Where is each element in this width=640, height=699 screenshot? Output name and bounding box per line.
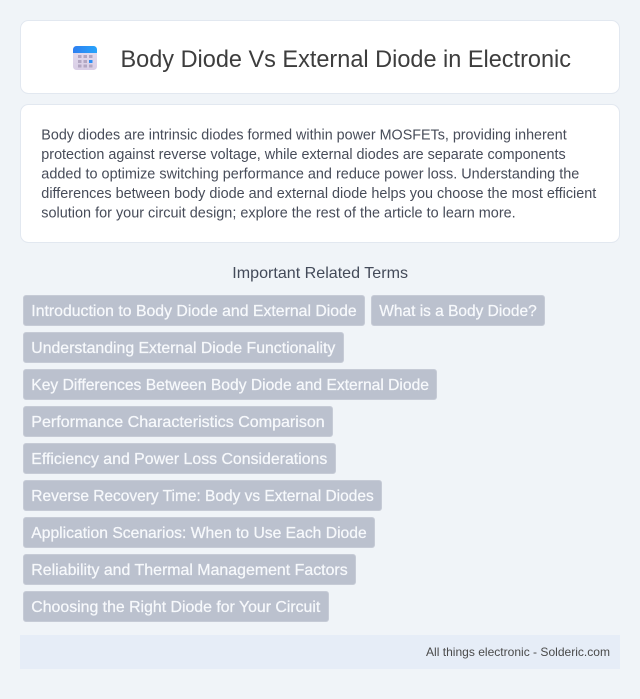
text block: introduction paragraph: Body diodes are intrinsic diodes formed within power MOSFETs, providing inherent [41,127,567,143]
heading: important related terms: Important Related Terms [232,265,408,282]
text block: introduction paragraph: added to optimize switching performance and reduce power loss. Understanding the [41,166,579,182]
tag: reverse recovery: Reverse Recovery Time: Body vs External Diodes [31,488,374,505]
introduction card [20,104,620,242]
tag: introduction [24,296,364,326]
tag: understanding external diode [24,332,344,362]
tag: application scenarios: Application Scenarios: When to Use Each Diode [31,525,367,542]
tag: key differences: Key Differences Between Body Diode and External Diode [31,377,429,394]
tag: application scenarios [24,518,374,548]
tag: reliability [24,554,356,584]
header card [20,20,620,94]
panel: introduction [20,104,620,242]
tag: introduction: Introduction to Body Diode and External Diode [31,303,357,320]
tag: choosing: Choosing the Right Diode for Your Circuit [31,599,321,616]
tag: efficiency [24,444,336,474]
tag: performance: Performance Characteristics Comparison [31,414,325,431]
text block: introduction paragraph: solution for your circuit design; explore the rest of the article to learn more. [41,205,516,221]
text block: introduction paragraph: differences between body diode and external diode helps you choose the most efficient [41,186,596,202]
tag: choosing [24,592,328,622]
panel: footer [20,635,620,669]
text block: introduction paragraph [41,127,596,221]
tag: efficiency: Efficiency and Power Loss Considerations [31,451,327,468]
footer credit: All things electronic - Solderic.com [426,645,610,659]
title: Body Diode Vs External Diode in Electronic [120,46,571,73]
tag: what is a body diode [372,296,544,326]
footer bar [20,635,620,669]
panel: related term tags [24,296,544,622]
panel: header [20,20,620,94]
tag: reliability: Reliability and Thermal Management Factors [31,562,348,579]
tag: performance [24,406,332,436]
tag: reverse recovery [24,480,382,510]
tag: what is a body diode: What is a Body Diode? [379,303,537,320]
tag: understanding external diode: Understanding External Diode Functionality [31,340,335,357]
tag: key differences [24,370,436,400]
text block: introduction paragraph: protection against reverse voltage, while external diodes are separate components [41,147,566,163]
icon: calendar [73,46,97,70]
